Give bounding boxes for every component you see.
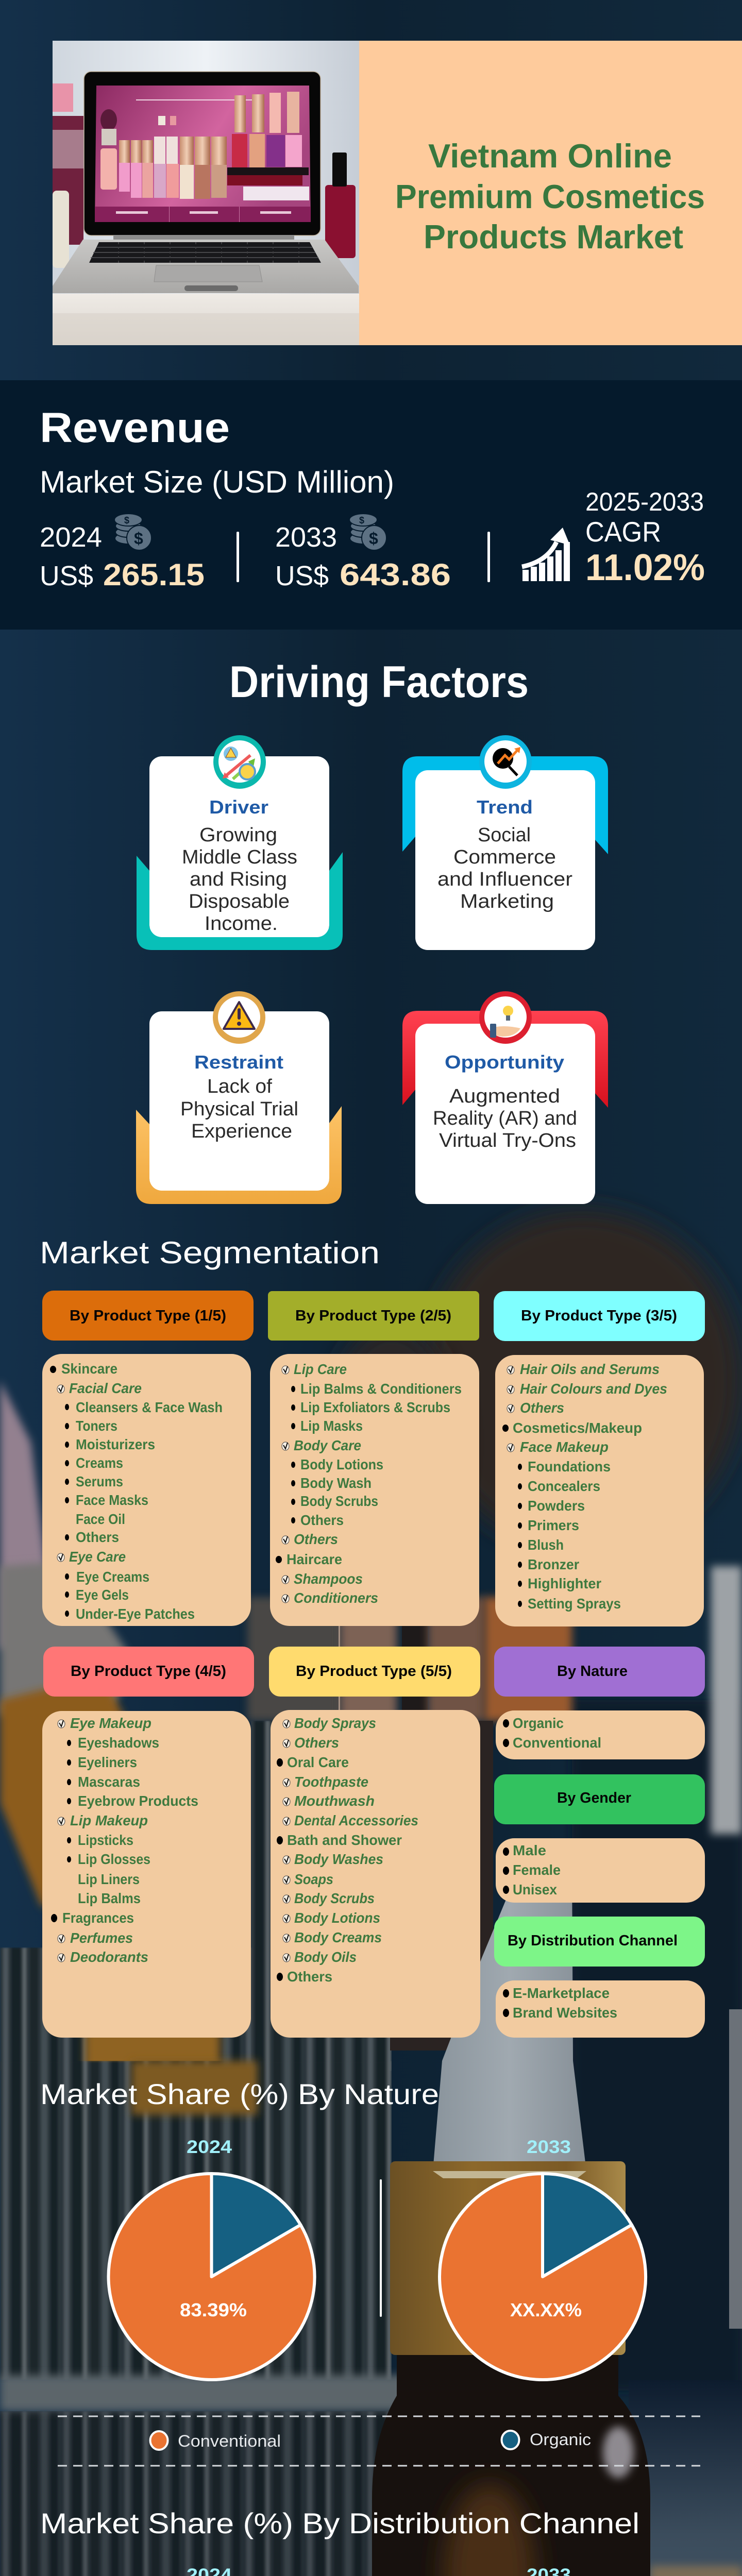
header: by nature [494,1647,705,1697]
list panel: by distribution channel: E-Marketplace [513,1985,610,2001]
list panel: product type 4: Lipsticks [78,1832,133,1848]
list panel: product type 2: Body Scrubs [300,1493,378,1509]
legend: organic: Organic [530,2430,591,2449]
list panel: product type 4: Lip Glosses [78,1851,150,1867]
list panel: product type 2: Others [300,1512,344,1528]
CAGR: 11.02% [585,547,705,588]
2024 value: 265.15 [103,557,205,592]
list panel: product type 4: Lip Balms [78,1890,141,1906]
card: opportunity [402,991,608,1204]
list panel: product type 5: Bath and Shower [287,1832,402,1848]
list panel: product type 5: Toothpaste [294,1774,368,1790]
card: trend: Social [478,824,531,846]
icon: magnifier with growth arrow [493,747,520,775]
list panel: product type 3: Primers [528,1517,579,1533]
list panel: product type 1: Toners [76,1418,117,1434]
list panel: product type 1: Eye Creams [76,1569,149,1585]
year label 2024: 2024 [187,2137,232,2157]
list panel: product type 5: Body Washes [294,1851,383,1867]
list panel: product type 2: Shampoos [294,1571,363,1587]
2024 value: 2024 [40,522,102,553]
header: by product type 5 [269,1647,480,1697]
card: restraint [136,991,342,1204]
list panel: product type 4: Eye Makeup [70,1715,151,1731]
list panel: by gender [496,1838,705,1903]
legend: conventional: Conventional [178,2432,281,2450]
card: opportunity: Opportunity [445,1052,564,1073]
card: driver: Driver [209,796,268,818]
list panel: product type 2: Lip Balms & Conditioners [300,1381,462,1397]
list panel: product type 2: Body Wash [300,1475,372,1491]
list panel: product type 5: Dental Accessories [294,1812,418,1828]
CAGR: CAGR [585,516,661,548]
list panel: product type 1: Under-Eye Patches [76,1606,195,1622]
list panel: product type 3: Cosmetics/Makeup [513,1420,642,1436]
list panel: product type 5: Soaps [294,1871,333,1887]
list panel: product type 5: Body Scrubs [294,1890,375,1906]
list panel: by gender: Unisex [513,1882,557,1897]
header: by gender: By Gender [557,1790,631,1806]
icon: warning triangle [224,1002,255,1029]
card: driver [137,735,343,950]
list panel: by nature: Organic [513,1715,564,1731]
list panel: product type 1: Eye Care [69,1549,126,1565]
revenue heading: Revenue [40,404,230,451]
list panel: product type 4: Eyeshadows [78,1735,159,1751]
icon: coins 2024 [114,514,151,550]
header: by product type 4: By Product Type (4/5) [71,1663,226,1680]
card: opportunity: Reality (AR) and [433,1108,577,1129]
list panel: product type 3: Powders [528,1498,585,1514]
card: driver: Middle Class [182,846,297,868]
header: by distribution channel: By Distribution Channel [508,1933,678,1949]
header: by product type 2 [268,1291,479,1341]
list panel: product type 5 [271,1710,480,2038]
header: by product type 2: By Product Type (2/5) [295,1308,451,1324]
list panel: product type 4: Fragrances [62,1910,134,1926]
header: by distribution channel [494,1917,705,1967]
list panel: product type 2: Others [294,1531,338,1547]
list panel: product type 1: Eye Gels [76,1587,129,1603]
list panel: product type 4 [42,1711,251,2038]
list panel: product type 5: Others [287,1969,332,1985]
list panel: product type 5: Oral Care [287,1754,349,1770]
CAGR: 2025-2033 [585,487,704,516]
header: by product type 3: By Product Type (3/5) [521,1308,677,1324]
title panel: Vietnam Online [428,137,672,175]
list panel: product type 2: Body Care [294,1437,361,1453]
icon: growth chart arrow [522,528,570,581]
card: restraint: Restraint [194,1052,283,1073]
list panel: product type 4: Eyebrow Products [78,1793,198,1809]
pie chart: nature 2024: 83.39% [180,2299,247,2320]
list panel: product type 2 [270,1354,479,1626]
list panel: product type 4: Perfumes [70,1930,133,1946]
list panel: product type 2: Lip Care [294,1361,347,1377]
list panel: product type 4: Deodorants [70,1949,148,1965]
2024 value: US$ [40,561,93,591]
list panel: product type 3: Hair Colours and Dyes [520,1381,667,1397]
card: driver: and Rising [190,869,287,890]
list panel: product type 1: Cleansers & Face Wash [76,1399,223,1415]
list panel: by gender: Female [513,1862,561,1878]
list panel: product type 3: Foundations [528,1459,611,1475]
list panel: product type 2: Lip Exfoliators & Scrubs [300,1399,450,1415]
list panel: product type 5: Body Oils [294,1949,357,1965]
list panel: product type 4: Lip Makeup [70,1812,148,1828]
list panel: product type 1: Face Oil [76,1511,125,1527]
card: trend [402,735,608,950]
list panel: product type 3: Hair Oils and Serums [520,1361,660,1377]
list panel: product type 5: Body Lotions [294,1910,380,1926]
card: restraint: Lack of [207,1076,272,1097]
header: by product type 4 [43,1647,254,1697]
icon: coins 2033 [349,514,386,550]
list panel: product type 1: Facial Care [69,1380,142,1396]
card: driver: Growing [199,824,277,846]
icon: driver arrows and gears [223,747,255,779]
list panel: product type 1: Face Masks [76,1492,148,1508]
header: by product type 5: By Product Type (5/5) [296,1663,452,1680]
list panel: product type 2: Haircare [286,1551,342,1567]
header: by product type 1: By Product Type (1/5) [70,1308,226,1324]
card: opportunity: Augmented [449,1086,560,1107]
hero panel [53,41,742,345]
list panel: product type 5: Mouthwash [294,1793,375,1809]
header: by nature: By Nature [557,1663,628,1680]
revenue panel [0,380,742,630]
list panel: by distribution channel: Brand Websites [513,2005,617,2021]
hero image: laptop with cosmetics [53,41,359,345]
market size subtitle: Market Size (USD Million) [40,465,394,499]
icon: hand with light bulb [490,1006,520,1038]
list panel: product type 1 [42,1354,251,1626]
pie chart: nature 2033: XX.XX% [510,2299,582,2320]
2033 value: 643.86 [340,557,451,592]
card: restraint: Experience [191,1121,292,1142]
title panel: Premium Cosmetics [395,178,705,215]
list panel: by nature [496,1710,705,1759]
list panel: product type 1: Skincare [61,1361,117,1377]
list panel: product type 5: Others [294,1735,339,1751]
CAGR [585,487,705,588]
year label 2033: 2033 [527,2137,571,2157]
list panel: product type 4: Eyeliners [78,1754,137,1770]
list panel: product type 2: Lip Masks [300,1418,363,1434]
list panel: product type 1: Others [76,1529,119,1545]
list panel: product type 3: Blush [528,1537,564,1553]
icon: coins 2024: $ [134,529,143,548]
list panel: product type 5: Body Creams [294,1929,382,1945]
list panel: product type 3 [495,1355,704,1626]
heading: market share by distribution channel: Market Share (%) By Distribution Channel [40,2507,639,2539]
2033 value [275,522,451,592]
icon: coins 2033: $ [369,529,378,548]
title panel [359,41,742,345]
legend: organic [502,2430,591,2449]
heading: market share by nature: Market Share (%) By Nature [40,2078,439,2110]
card: trend: Commerce [453,846,556,868]
pie chart: nature 2033 [440,2174,646,2380]
header: by product type 1 [42,1291,254,1341]
list panel: product type 5: Body Sprays [294,1715,376,1731]
heading: market segmentation: Market Segmentation [40,1235,380,1270]
pie chart: nature 2024 [109,2174,315,2380]
list panel: product type 3: Highlighter [528,1575,601,1591]
card: restraint: Physical Trial [180,1098,298,1120]
title panel: Products Market [424,218,683,256]
list panel: product type 3: Concealers [528,1478,600,1494]
heading: driving factors: Driving Factors [229,657,529,707]
list panel: by distribution channel [496,1980,705,2038]
card: driver: Disposable [189,891,290,912]
card: trend: Trend [477,796,533,818]
list panel: product type 2: Body Lotions [300,1456,383,1472]
list panel: product type 2: Conditioners [294,1590,378,1606]
card: trend: and Influencer [437,869,572,890]
icon: coins 2024: $ [124,515,129,526]
list panel: product type 3: Bronzer [528,1556,579,1572]
list panel: product type 3: Face Makeup [520,1439,609,1455]
header: by gender [494,1774,705,1824]
list panel: product type 1: Creams [76,1455,123,1471]
2033 value: 2033 [275,522,337,553]
list panel: product type 3: Setting Sprays [528,1596,621,1612]
list panel: product type 3: Others [520,1400,564,1416]
2024 value [40,522,205,592]
brush and makeup tubes on screen [100,92,309,200]
card: driver: Income. [205,913,278,935]
2033 value: US$ [275,561,329,591]
list panel: product type 1: Moisturizers [76,1436,155,1452]
list panel: product type 1: Serums [76,1473,123,1489]
header: by product type 3 [494,1291,705,1341]
list panel: by gender: Male [513,1842,546,1858]
list panel: product type 4: Mascaras [78,1774,140,1790]
icon: coins 2033: $ [359,515,364,526]
list panel: by nature: Conventional [513,1735,601,1751]
card: opportunity: Virtual Try-Ons [439,1130,576,1151]
list panel: product type 4: Lip Liners [78,1871,140,1887]
card: trend: Marketing [460,891,554,912]
